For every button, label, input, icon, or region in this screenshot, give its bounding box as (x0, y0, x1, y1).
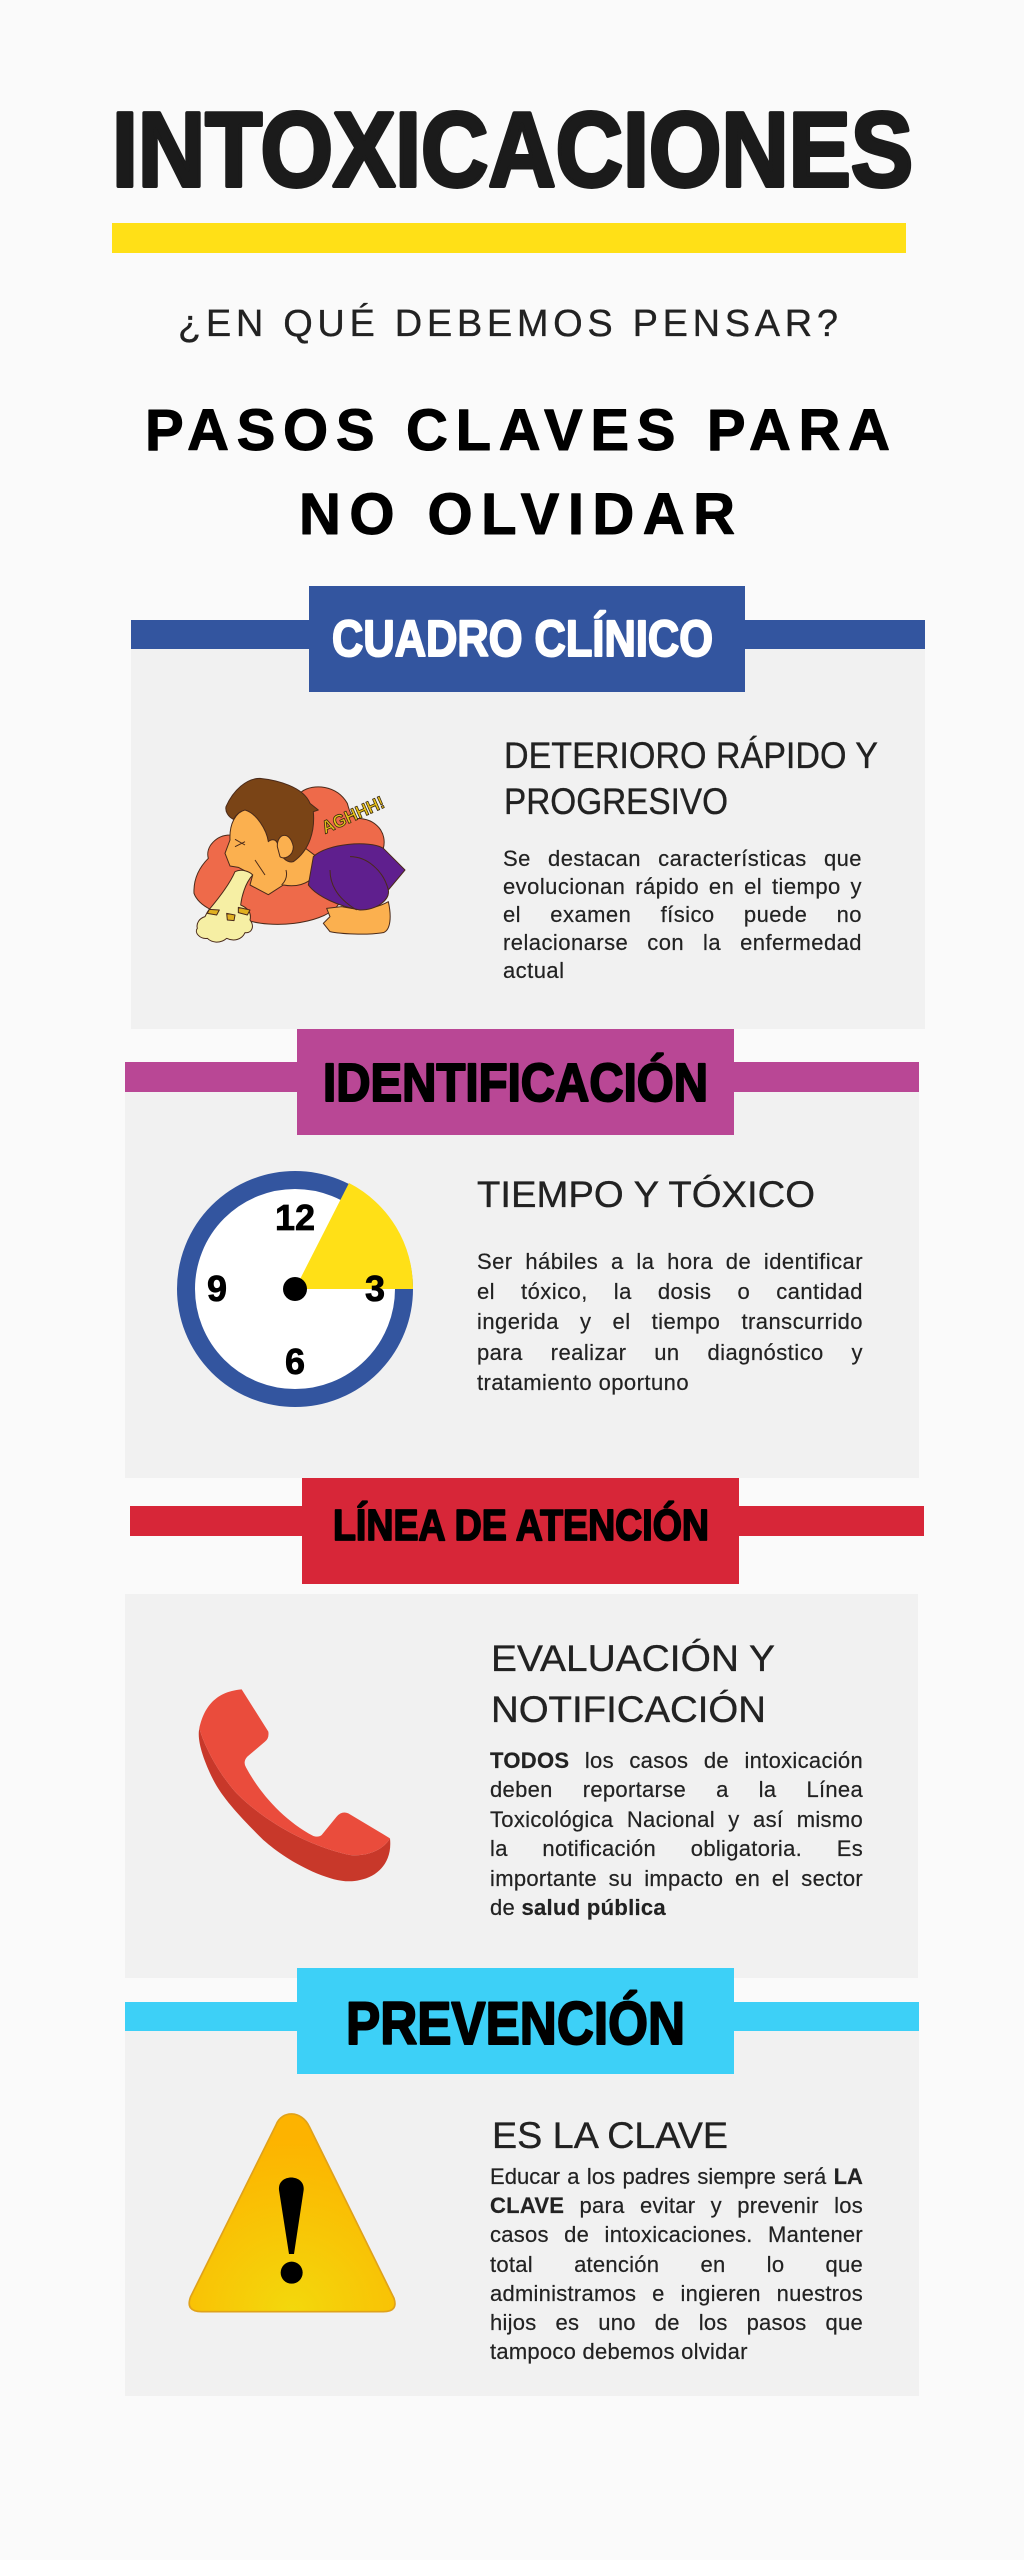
heading: es la clave: ES LA CLAVE (492, 2115, 728, 2156)
text: línea de atención: importante su impacto en el sector (490, 1866, 863, 1891)
text: línea de atención: Toxicológica Nacional y así mismo (490, 1807, 863, 1832)
text: línea de atención: de salud pública (490, 1895, 666, 1920)
banner: cuadro clínico (131, 586, 925, 692)
heading: deterioro (504, 735, 878, 822)
icon: vomiting man (194, 778, 405, 942)
text: cuadro clínico (503, 845, 862, 995)
icon: clock: 12 (275, 1197, 315, 1238)
main heading: PASOS CLAVES PARA (145, 398, 890, 463)
text: prevención: tampoco debemos olvidar (490, 2339, 748, 2364)
heading: deterioro: DETERIORO RÁPIDO Y (504, 735, 878, 776)
heading: evaluación y notificación (491, 1638, 775, 1730)
icon: clock: 6 (285, 1341, 305, 1382)
text: línea de atención: TODOS los casos de intoxicación (490, 1748, 863, 1773)
main heading: NO OLVIDAR (299, 482, 735, 547)
banner: línea de atención (130, 1478, 924, 1584)
text: identificación: ingerida y el tiempo transcurrido (477, 1309, 863, 1334)
text: identificación: tratamiento oportuno (477, 1370, 689, 1395)
text: identificación (477, 1247, 863, 1402)
icon: clock (186, 1180, 413, 1398)
text: prevención: total atención en lo que (490, 2252, 863, 2277)
text: línea de atención (490, 1746, 863, 1931)
panel: prevención (125, 1968, 919, 2396)
title: INTOXICACIONES (112, 91, 913, 209)
heading: tiempo y tóxico: TIEMPO Y TÓXICO (477, 1174, 815, 1215)
text: identificación: para realizar un diagnóstico y (477, 1340, 863, 1365)
icon: vomiting man: AGHHH! (318, 792, 388, 838)
icon: phone (199, 1689, 390, 1881)
text: cuadro clínico: evolucionan rápido en el tiempo y (503, 874, 862, 899)
heading: evaluación y notificación: NOTIFICACIÓN (491, 1689, 766, 1730)
text: prevención: CLAVE para evitar y prevenir los (490, 2193, 863, 2218)
banner: prevención: PREVENCIÓN (346, 1990, 685, 2057)
text: prevención: hijos es uno de los pasos que (490, 2310, 863, 2335)
banner: línea de atención: LÍNEA DE ATENCIÓN (333, 1500, 709, 1550)
text: cuadro clínico: actual (503, 958, 564, 983)
text: prevención: Educar a los padres siempre será LA (490, 2164, 863, 2189)
text: prevención: administramos e ingieren nuestros (490, 2281, 863, 2306)
text: línea de atención: la notificación obligatoria. Es (490, 1836, 863, 1861)
yellow title underline (112, 223, 906, 253)
panel: identificación (125, 1029, 919, 1478)
banner: identificación: IDENTIFICACIÓN (323, 1053, 708, 1113)
panel: línea de atención (125, 1478, 924, 1978)
icon: warning triangle (189, 2114, 395, 2312)
subtitle: ¿EN QUÉ DEBEMOS PENSAR? (178, 302, 838, 345)
banner: cuadro clínico: CUADRO CLÍNICO (332, 610, 713, 667)
text: identificación: Ser hábiles a la hora de identificar (477, 1249, 863, 1274)
banner: prevención (125, 1968, 919, 2074)
main heading (145, 398, 890, 547)
text: prevención (490, 2162, 863, 2372)
banner: identificación (125, 1029, 919, 1135)
heading: evaluación y notificación: EVALUACIÓN Y (491, 1638, 775, 1679)
icon: clock: 3 (365, 1268, 385, 1309)
heading: deterioro: PROGRESIVO (504, 781, 728, 822)
text: cuadro clínico: relacionarse con la enfermedad (503, 930, 862, 955)
icon: clock: 9 (207, 1268, 227, 1309)
text: identificación: el tóxico, la dosis o cantidad (477, 1279, 863, 1304)
text: cuadro clínico: Se destacan características que (503, 846, 862, 871)
text: línea de atención: deben reportarse a la Línea (490, 1777, 863, 1802)
panel: cuadro clínico (131, 586, 925, 1029)
text: prevención: casos de intoxicaciones. Mantener (490, 2222, 863, 2247)
text: cuadro clínico: el examen físico puede no (503, 902, 862, 927)
